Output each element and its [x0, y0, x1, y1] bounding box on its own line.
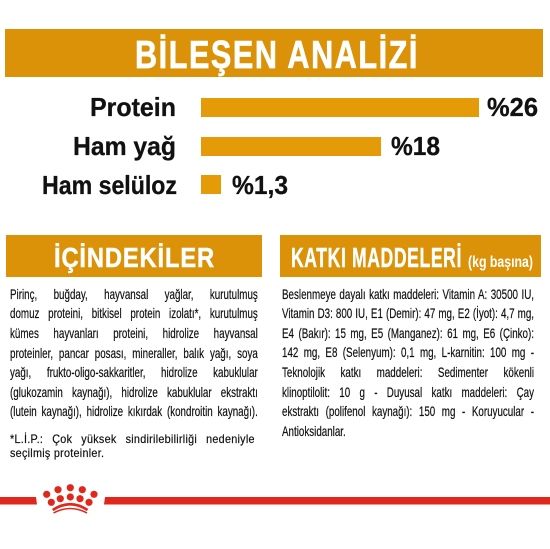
- text block: additives list: Vitamin D3: 800 IU, E1 (Demir): 47 mg, E2 (İyot): 4,7 mg,: [282, 305, 534, 321]
- footer band right: [104, 497, 550, 504]
- text block: ingredients list: domuz proteini, bitkisel protein izolatı*, kurutulmuş: [10, 305, 258, 321]
- text block: ingredients footnote: *L.İ.P.: Çok yüksek sindirilebilirliği nedeniyle: [10, 432, 255, 446]
- row: protein: %26: [487, 92, 538, 122]
- row: crude fat: Ham yağ: [73, 131, 176, 161]
- text block: additives list: Beslenmeye dayalı katkı maddeleri: Vitamin A: 30500 IU,: [282, 286, 534, 302]
- row: protein: Protein: [90, 92, 176, 122]
- text block: additives list: ekstraktı (polifenol kaynağı): 150 mg - Koruyucular -: [282, 403, 534, 419]
- bar chart: composition values: [42, 92, 538, 200]
- text block: additives list: Teknolojik katkı maddeleri: Sedimenter kökenli: [282, 364, 534, 380]
- text block: ingredients list: yağı, frukto-oligo-sakkaritler, hidrolize kabuklular: [10, 364, 258, 380]
- text block: ingredients footnote: seçilmiş proteinler.: [10, 446, 104, 460]
- panel: ingredients header: [6, 235, 262, 277]
- panel: ingredients header: İÇİNDEKİLER: [54, 242, 215, 273]
- panel: composition analysis header: BİLEŞEN ANALİZİ: [135, 34, 419, 77]
- text block: additives list: [282, 286, 534, 439]
- row: crude cellulose: %1,3: [232, 170, 288, 200]
- text block: ingredients list: Pirinç, buğday, hayvansal yağlar, kurutulmuş: [10, 286, 258, 302]
- text block: ingredients list: kümes hayvanları proteini, hidrolize hayvansal: [10, 325, 258, 341]
- text block: ingredients list: (lutein kaynağı), hidrolize kıkırdak (kondroitin kaynağı).: [10, 403, 258, 419]
- row: crude cellulose: Ham selüloz: [42, 170, 177, 200]
- text block: ingredients list: [10, 286, 258, 419]
- text block: additives list: E4 (Bakır): 15 mg, E5 (Manganez): 61 mg, E6 (Çinko):: [282, 325, 534, 341]
- row: protein: [90, 92, 538, 122]
- icon: crown logo: [43, 484, 98, 513]
- text block: additives list: Antioksidanlar.: [282, 423, 346, 439]
- text block: additives list: 142 mg, E8 (Selenyum): 0,1 mg, L-karnitin: 100 mg -: [282, 344, 534, 360]
- row: crude cellulose: [42, 170, 288, 200]
- text block: ingredients list: proteinler, pancar posası, mineraller, balık yağı, soya: [10, 345, 258, 361]
- panel: additives header: [280, 235, 541, 277]
- panel: composition analysis header: [5, 29, 543, 77]
- text block: additives list: klinoptilolit: 10 g - Duyusal katkı maddeleri: Çay: [282, 384, 534, 400]
- text block: ingredients footnote: [10, 432, 255, 460]
- row: crude fat: %18: [391, 131, 440, 161]
- panel: additives header: (kg başına): [468, 254, 533, 271]
- row: crude fat: [73, 131, 440, 161]
- text block: ingredients list: (glukozamin kaynağı), hidrolize kabuklular ekstraktı: [10, 384, 258, 400]
- footer band left: [0, 497, 37, 504]
